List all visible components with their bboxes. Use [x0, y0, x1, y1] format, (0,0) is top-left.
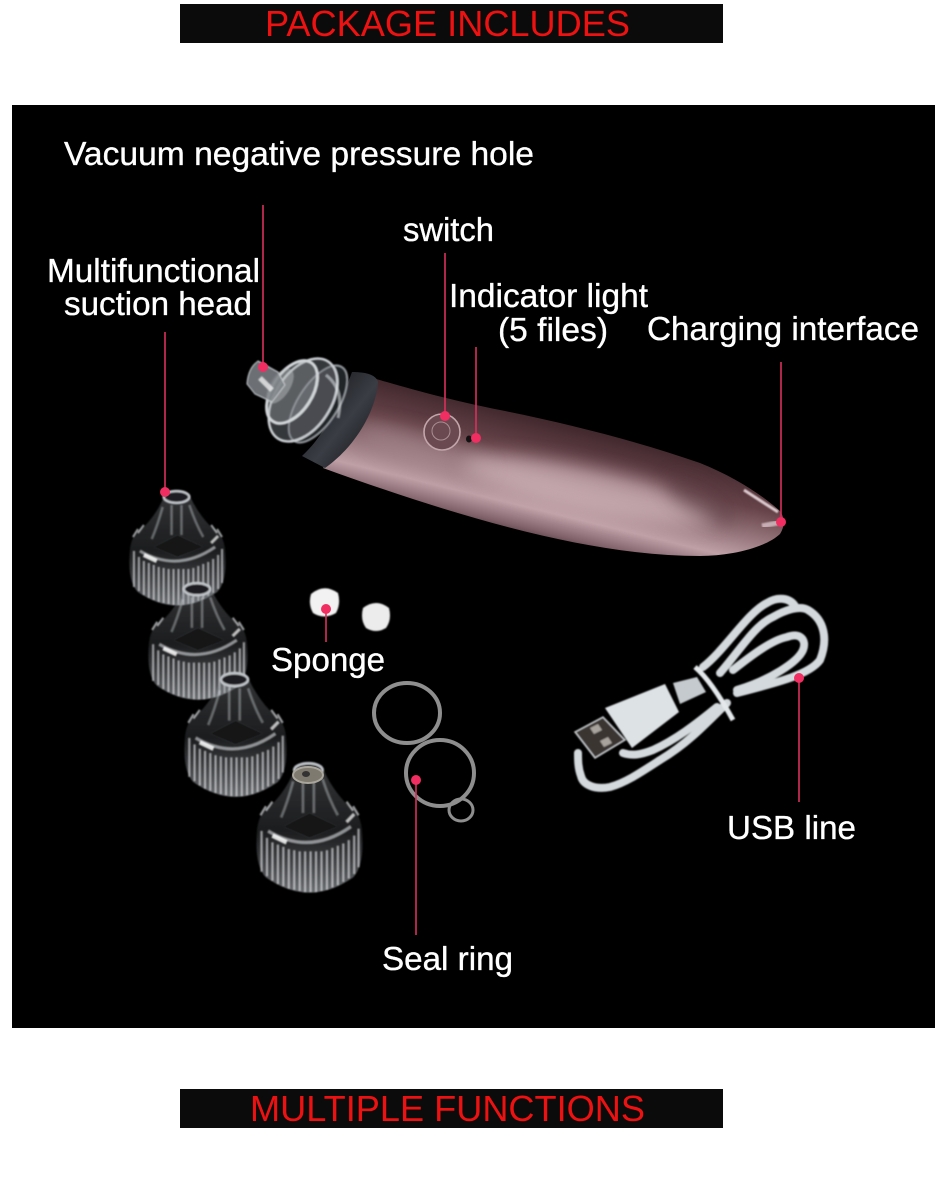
label: seal ring: Seal ring: [382, 940, 513, 977]
label: vacuum hole: Vacuum negative pressure hole: [64, 135, 534, 172]
suction heads: [129, 491, 363, 893]
label: usb line: USB line: [727, 809, 856, 846]
label: indicator light: Indicator light: [449, 277, 648, 314]
indicator hole: [466, 436, 472, 442]
massager pen: [247, 346, 784, 556]
header bar: multiple functions: MULTIPLE FUNCTIONS: [250, 1088, 645, 1129]
usb cable: [575, 599, 824, 788]
label: indicator light: (5 files): [498, 311, 608, 348]
transparent nozzle: [247, 346, 359, 454]
label: sponge: Sponge: [271, 641, 385, 678]
seal rings: [374, 683, 474, 821]
power switch: [424, 414, 460, 450]
label: multifunctional suction head: suction head: [64, 285, 252, 322]
header bar: package includes: PACKAGE INCLUDES: [265, 3, 630, 44]
label: charging interface: Charging interface: [647, 310, 919, 347]
label: indicator light: [449, 277, 648, 348]
panel: product photo: [12, 105, 935, 1028]
leader lines and dots: [160, 205, 804, 935]
label: switch: switch: [403, 211, 494, 248]
label: multifunctional suction head: [47, 252, 260, 322]
collar: [302, 372, 378, 468]
header bar: package includes: [180, 3, 723, 44]
sponges: [310, 588, 390, 631]
label: multifunctional suction head: Multifunctional: [47, 252, 260, 289]
